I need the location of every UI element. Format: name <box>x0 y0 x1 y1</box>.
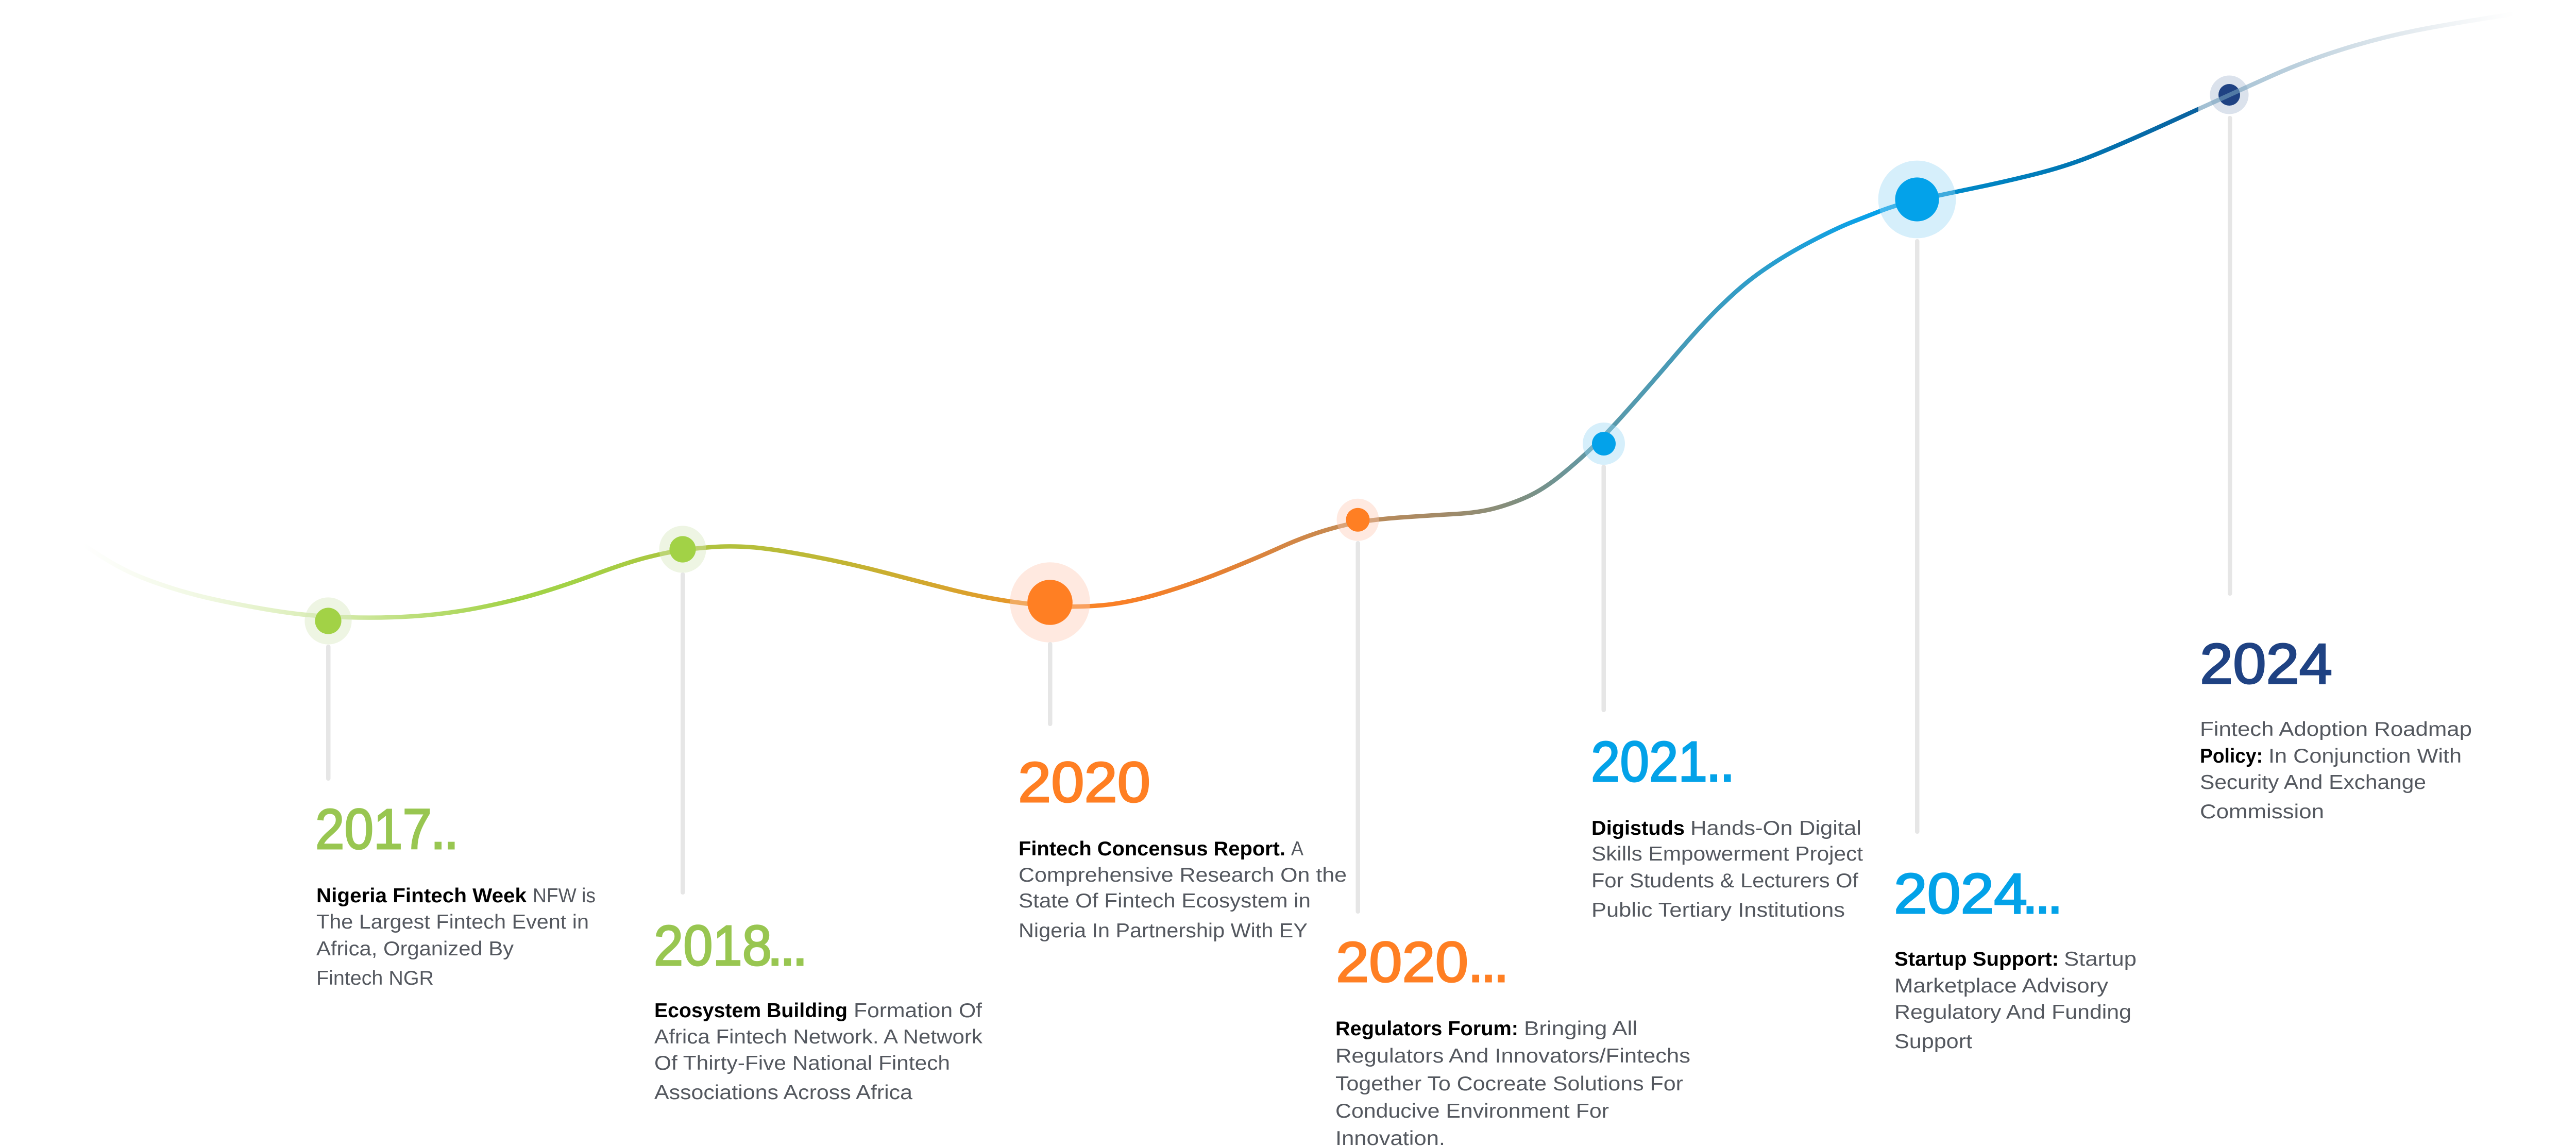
description 2021: For Students & Lecturers Of <box>1591 870 1858 892</box>
milestone 2018 <box>654 914 983 1104</box>
description 2020 report: State Of Fintech Ecosystem in <box>1019 890 1311 912</box>
description 2021 <box>1591 817 1863 921</box>
description 2018 <box>654 1000 983 1104</box>
description 2021: Hands-On Digital <box>1690 817 1861 839</box>
description 2017: The Largest Fintech Event in <box>316 911 589 933</box>
year 2021: .. <box>1706 730 1735 794</box>
description 2017: Nigeria Fintech Week <box>316 885 527 907</box>
description 2024 policy: Fintech Adoption Roadmap <box>2200 718 2472 740</box>
description 2017: NFW is <box>533 885 596 907</box>
description 2017 <box>316 885 596 989</box>
description 2017: Fintech NGR <box>316 967 434 989</box>
year 2018: 2018 <box>654 914 772 978</box>
description 2018: Formation Of <box>854 1000 982 1022</box>
description 2020 forum: Together To Cocreate Solutions For <box>1335 1073 1683 1095</box>
stem 2020 report <box>1048 642 1052 726</box>
description 2018: Associations Across Africa <box>654 1082 912 1104</box>
description 2020 forum: Regulators Forum: <box>1335 1018 1518 1040</box>
stem 2017 <box>326 645 331 781</box>
description 2020 report: Nigeria In Partnership With EY <box>1019 920 1308 942</box>
description 2020 report <box>1019 838 1347 942</box>
description 2024 startup: Marketplace Advisory <box>1894 975 2109 997</box>
description 2020 report: A <box>1291 838 1303 860</box>
milestone 2024 policy <box>2200 632 2472 823</box>
description 2024 startup <box>1894 948 2137 1053</box>
description 2018: Africa Fintech Network. A Network <box>654 1026 983 1048</box>
year 2018: ... <box>767 914 808 978</box>
stem 2018 <box>681 572 685 895</box>
description 2020 report: Comprehensive Research On the <box>1019 864 1347 886</box>
year 2024 startup: ... <box>2022 862 2063 925</box>
milestone 2020 report <box>1018 751 1347 942</box>
year 2020 forum: 2020 <box>1336 931 1468 994</box>
description 2020 forum: Regulators And Innovators/Fintechs <box>1335 1045 1690 1067</box>
description 2020 forum: Conducive Environment For <box>1335 1100 1609 1122</box>
description 2017: Africa, Organized By <box>316 938 514 960</box>
description 2024 policy: Policy: <box>2200 745 2263 767</box>
description 2024 policy: Commission <box>2200 801 2324 823</box>
stem 2021 <box>1601 465 1606 712</box>
description 2024 startup: Regulatory And Funding <box>1894 1001 2131 1023</box>
marker 2024 policy <box>2210 75 2248 114</box>
description 2024 policy: Security And Exchange <box>2200 771 2426 794</box>
description 2020 report: Fintech Concensus Report. <box>1019 838 1285 860</box>
marker 2017 <box>304 597 352 645</box>
fading curve tail <box>2198 18 2477 111</box>
description 2021: Public Tertiary Institutions <box>1591 899 1845 921</box>
stem 2020 forum <box>1356 541 1360 914</box>
stem 2024 startup <box>1915 239 1920 834</box>
year 2017: 2017 <box>315 798 432 861</box>
milestone 2021 <box>1591 730 1863 921</box>
description 2024 startup: Support <box>1894 1031 1972 1053</box>
stem 2024 policy <box>2228 116 2232 596</box>
description 2021: Skills Empowerment Project <box>1591 843 1863 865</box>
description 2020 forum <box>1335 1018 1690 1146</box>
year 2024 policy: 2024 <box>2200 632 2332 696</box>
marker 2021 <box>1583 423 1625 465</box>
year 2024 startup: 2024 <box>1894 862 2027 925</box>
description 2018: Ecosystem Building <box>654 1000 848 1022</box>
marker 2024 startup <box>1878 161 1956 238</box>
marker 2020 forum <box>1336 499 1379 541</box>
description 2021: Digistuds <box>1591 817 1685 839</box>
marker 2018 <box>659 526 706 573</box>
timeline curve <box>116 107 2198 620</box>
year 2021: 2021 <box>1591 730 1707 794</box>
year 2020: 2020 <box>1018 751 1150 814</box>
year 2017: .. <box>430 798 459 861</box>
description 2024 policy: In Conjunction With <box>2268 745 2462 767</box>
milestone 2017 <box>315 798 596 989</box>
description 2024 startup: Startup Support: <box>1894 948 2059 970</box>
description 2024 startup: Startup <box>2064 948 2137 970</box>
milestone 2020 forum <box>1335 931 1690 1146</box>
marker 2020 report <box>1010 562 1090 643</box>
description 2024 policy <box>2200 718 2472 823</box>
description 2018: Of Thirty-Five National Fintech <box>654 1052 950 1074</box>
year 2020 forum: ... <box>1468 931 1509 994</box>
description 2020 forum: Bringing All <box>1524 1018 1637 1040</box>
milestone 2024 startup <box>1894 862 2137 1053</box>
